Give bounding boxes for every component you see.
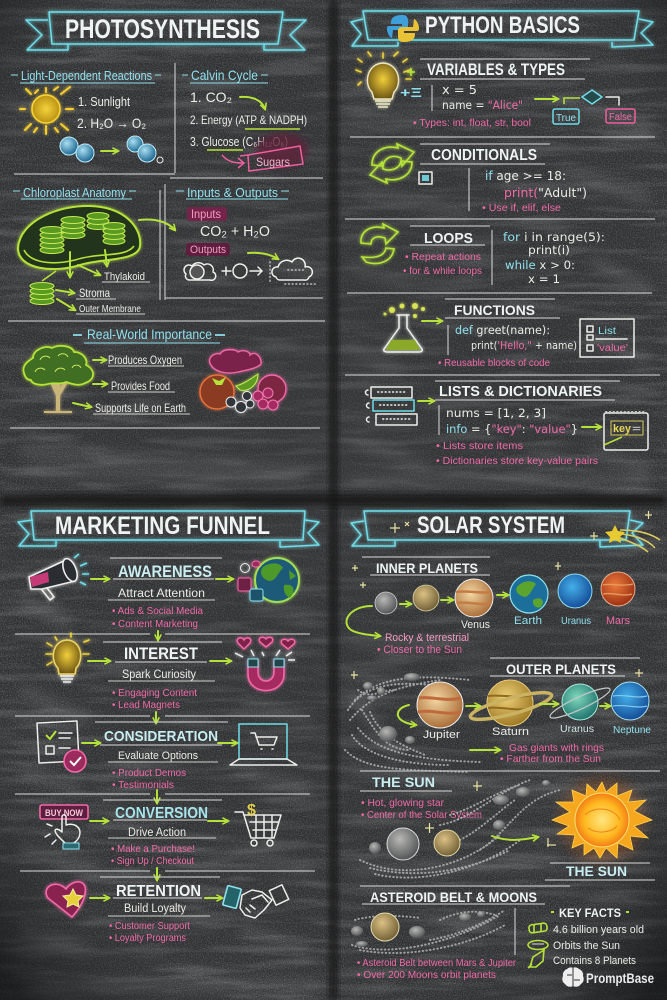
section: key facts: KEY FACTS [559, 906, 621, 920]
stage: retention: Build Loyalty [124, 903, 186, 915]
logo: promptbase: PromptBase [586, 970, 654, 986]
icon: light bulb [356, 52, 415, 107]
icon: globe and social badges [238, 558, 299, 602]
section: loops: • for & while loops [403, 266, 482, 277]
panel: solar system [345, 511, 660, 987]
section: the sun [360, 774, 655, 880]
section: lists and dictionaries: • Lists store items [436, 440, 523, 452]
label: outputs: Outputs [190, 244, 226, 256]
stage: retention: • Customer Support [109, 920, 190, 932]
stage: awareness: Attract Attention [118, 588, 205, 600]
section: inner planets [347, 557, 635, 656]
icon: heart and star [46, 882, 85, 917]
section: real-world importance: Provides Food [111, 379, 170, 393]
section: variables and types [356, 52, 635, 129]
section: inner planets: Earth [514, 615, 542, 627]
section: outer planets: Neptune [613, 724, 651, 736]
section: chloroplast anatomy: Thylakoid [104, 271, 145, 283]
section: loops: print(i) [528, 243, 570, 257]
section: outer planets: • Farther from the Sun [500, 753, 601, 765]
icon: key calendar card [604, 412, 648, 450]
panel: marketing funnel [15, 511, 319, 944]
icon: list rows [366, 387, 417, 425]
stage: retention: • Loyalty Programs [109, 932, 186, 944]
icon: pointing hand [45, 815, 80, 849]
section: inner planets: Mars [606, 615, 630, 627]
section: inner planets: Rocky & terrestrial [385, 632, 469, 644]
stage: awareness: AWARENESS [118, 562, 212, 581]
icon: loop arrows [361, 224, 398, 263]
diagram: chloroplast [18, 206, 140, 269]
section: the sun: THE SUN [566, 864, 627, 879]
icon: laptop with cart [230, 724, 297, 765]
section: variables and types: • Types: int, float, str, bool [413, 117, 531, 129]
section: inputs and outputs [139, 185, 315, 284]
icon: water bubbles [60, 136, 163, 163]
section: outer planets [345, 658, 651, 772]
section: inputs and outputs: CO₂ + H₂O [200, 223, 270, 240]
section: functions: def greet(name): [455, 323, 550, 337]
panel: python basics [345, 11, 660, 467]
section: conditionals: print("Adult") [504, 186, 587, 200]
asteroid field: moons [351, 910, 505, 953]
title banner: marketing funnel: MARKETING FUNNEL [55, 512, 270, 540]
section: real-world importance: Supports Life on Earth [95, 401, 186, 415]
button: buy now [40, 805, 88, 819]
section: calvin cycle [182, 67, 308, 171]
logo: promptbase [562, 967, 654, 987]
section: chloroplast anatomy: Outer Membrane [79, 303, 141, 315]
diagram: output molecules [184, 258, 315, 284]
section: conditionals: • Use if, elif, else [482, 202, 561, 214]
section: inputs and outputs: Inputs & Outputs [187, 185, 278, 200]
icon: glowing sun [552, 778, 652, 862]
section: loops: x = 1 [528, 272, 560, 286]
icon: shopping cart [235, 802, 281, 846]
section: outer planets: Uranus [560, 723, 594, 735]
stage: conversion: • Make a Purchase! [111, 843, 195, 855]
section: chloroplast anatomy: Chloroplast Anatomy [23, 185, 126, 200]
section: outer planets: Gas giants with rings [509, 742, 604, 754]
ribbon: sugars: Sugars [256, 155, 290, 169]
asteroid field: sun [360, 780, 580, 878]
section: lists and dictionaries: info = {"key": "value"} [446, 422, 578, 436]
icon: orbit ring [528, 940, 548, 950]
section: lists and dictionaries: LISTS & DICTIONARIES [439, 384, 602, 400]
stage: conversion: • Sign Up / Checkout [111, 855, 194, 867]
section: key facts: 4.6 billion years old [553, 924, 644, 936]
section: calvin cycle: 3. Glucose (C₆H₁₂O₆) [190, 135, 288, 149]
section: real-world importance: Produces Oxygen [108, 353, 182, 367]
section: lists and dictionaries: • Dictionaries store key-value pairs [436, 455, 598, 467]
stage: consideration [37, 712, 297, 791]
stage: interest: INTEREST [124, 645, 198, 663]
stage: consideration: • Testimonials [112, 779, 174, 791]
section: real-world importance: Real-World Importance [87, 326, 212, 342]
stage: consideration: CONSIDERATION [104, 728, 218, 745]
card: list values [580, 319, 634, 357]
icon: small code box [419, 172, 432, 184]
icon: magnet and hearts [235, 637, 295, 690]
stage: conversion: CONVERSION [115, 805, 208, 822]
icon: handshake [223, 885, 289, 918]
icon: rocket [528, 950, 544, 968]
section: asteroid belt and moons [351, 889, 545, 981]
section: loops [361, 224, 605, 286]
planets row: inner [375, 572, 635, 617]
title banner: solar system: SOLAR SYSTEM [417, 512, 565, 539]
stage: consideration: Evaluate Options [118, 750, 198, 762]
section: calvin cycle: Calvin Cycle [191, 67, 258, 83]
stage: awareness [29, 554, 299, 630]
icon: food [200, 350, 286, 412]
section: chloroplast anatomy: Stroma [79, 286, 110, 300]
button: buy now: BUY NOW [45, 808, 83, 818]
diagram: true false flow: False [609, 112, 632, 123]
icon: light bulb [46, 633, 89, 682]
section: calvin cycle: 2. Energy (ATP & NADPH) [190, 113, 307, 127]
title banner: photosynthesis [26, 12, 306, 50]
section: key facts: Orbits the Sun [553, 940, 620, 952]
icon: megaphone [29, 554, 89, 600]
stage: awareness: • Content Marketing [112, 618, 198, 630]
icon: calendar band [529, 923, 547, 933]
section: lists and dictionaries [366, 381, 648, 467]
section: conditionals [370, 144, 587, 214]
section: inner planets: • Closer to the Sun [377, 644, 462, 656]
icon: cycle arrows [370, 144, 414, 183]
section: chloroplast anatomy [13, 185, 150, 315]
title banner: marketing funnel [18, 511, 319, 547]
stage: interest: • Engaging Content [112, 687, 197, 699]
title banner: photosynthesis: PHOTOSYNTHESIS [65, 14, 260, 44]
icon: python logo [387, 15, 419, 42]
section: loops: LOOPS [424, 230, 473, 247]
icon: sun [20, 87, 73, 134]
planets row: outer [417, 680, 649, 728]
section: inner planets: INNER PLANETS [376, 560, 478, 576]
icon: tree [23, 346, 93, 412]
title banner: python basics: PYTHON BASICS [425, 12, 580, 39]
icon: key calendar card: key [613, 423, 632, 435]
icon: thylakoid stack [30, 282, 54, 304]
card: list values: 'value' [597, 343, 628, 354]
section: asteroid belt and moons: ASTEROID BELT & MOONS [370, 889, 537, 905]
section: variables and types: x = 5 [442, 83, 477, 97]
section: light-dependent reactions: 2. H₂O → O₂ [77, 115, 146, 131]
section: functions: • Reusable blocks of code [438, 357, 550, 369]
stage: interest: • Lead Magnets [112, 699, 180, 711]
section: lists and dictionaries: nums = [1, 2, 3] [446, 406, 546, 420]
section: functions: print('Hello," + name) [471, 340, 577, 352]
section: loops: while x > 0: [505, 258, 575, 272]
card: list values: List [598, 326, 616, 337]
stage: interest [46, 631, 295, 711]
section: outer planets: Jupiter [423, 729, 460, 741]
section: asteroid belt and moons: • Over 200 Moons orbit planets [357, 969, 496, 981]
diagram: true false flow [553, 90, 635, 124]
section: light-dependent reactions: 1. Sunlight [78, 94, 130, 109]
section: real-world importance [23, 326, 286, 415]
section: light-dependent reactions: Light-Dependent Reactions [21, 68, 152, 83]
stage: retention [46, 868, 289, 944]
section: key facts: Contains 8 Planets [553, 955, 636, 967]
section: functions [384, 299, 634, 369]
icon: key calendar card: = [632, 424, 641, 435]
section: light-dependent reactions [11, 68, 163, 163]
stage: consideration: • Product Demos [112, 767, 186, 779]
stage: conversion: Drive Action [128, 827, 186, 839]
stage: interest: Spark Curiosity [122, 669, 196, 681]
section: conditionals: CONDITIONALS [431, 147, 537, 164]
section: outer planets: Saturn [492, 726, 529, 738]
label: inputs: Inputs [191, 209, 221, 221]
decorative stars [351, 511, 652, 679]
section: the sun: • Hot, glowing star [361, 797, 444, 809]
section: variables and types: VARIABLES & TYPES [427, 60, 565, 79]
section: outer planets: OUTER PLANETS [506, 661, 616, 677]
section: inner planets: Venus [461, 619, 490, 631]
section: conditionals: if age >= 18: [485, 169, 566, 183]
section: functions: FUNCTIONS [454, 302, 535, 318]
title banner: python basics [351, 11, 653, 47]
section: loops: • Repeat actions [405, 251, 481, 263]
section: variables and types: name = "Alice" [442, 98, 523, 112]
icon: checklist [37, 721, 86, 772]
stage: retention: RETENTION [116, 883, 201, 900]
diagram: true false flow: True [556, 113, 576, 124]
section: inner planets: Uranus [561, 615, 591, 627]
label: inputs [187, 207, 227, 221]
section: calvin cycle: 1. CO₂ [190, 89, 232, 105]
stage: conversion [40, 790, 281, 867]
asteroid field: outer [345, 673, 480, 772]
stage: awareness: • Ads & Social Media [112, 605, 203, 617]
icon: shooting star [605, 525, 660, 552]
section: key facts [528, 906, 644, 968]
section: the sun: • Center of the Solar System [361, 809, 482, 821]
section: variables and types: +Ξ [400, 85, 422, 100]
panel: photosynthesis [8, 12, 325, 428]
icon: flask [384, 303, 425, 352]
section: loops: for i in range(5): [503, 230, 605, 244]
title banner: solar system [351, 511, 643, 547]
section: asteroid belt and moons: • Asteroid Belt between Mars & Jupiter [357, 957, 516, 969]
section: the sun: THE SUN [372, 774, 435, 790]
icon: shopping cart: $ [247, 802, 256, 819]
